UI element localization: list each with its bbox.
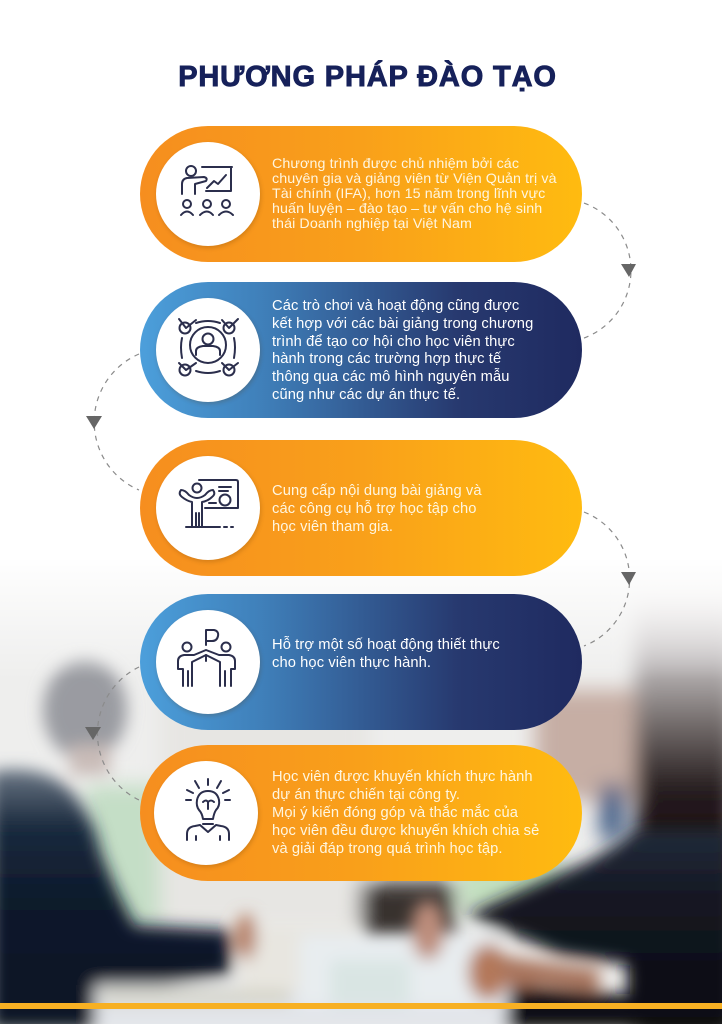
icon: person surrounded by targets: [156, 298, 260, 402]
text: step 4: [272, 636, 500, 671]
arrow: pill 1 to pill 2: [584, 202, 636, 339]
title: PHƯƠNG PHÁP ĐÀO TẠO: [178, 61, 557, 93]
text: step 2: hành trong các trường hợp thực tế: [272, 351, 501, 367]
text: step 1: huấn luyện – đào tạo – tư vấn cho hệ sinh: [272, 201, 542, 217]
text: step 1: thái Doanh nghiệp tại Việt Nam: [272, 216, 472, 232]
arrow: pill 4 to pill 5: [85, 666, 140, 800]
text: step 5: học viên đều được khuyến khích chia sẻ: [272, 823, 539, 839]
text: step 5: và giải đáp trong quá trình học tập.: [272, 841, 503, 857]
text: step 1: chuyên gia và giảng viên từ Viện Quản trị và: [272, 171, 557, 187]
icon: presenter with chart and audience: [156, 142, 260, 246]
icon: presenter with board: [156, 456, 260, 560]
text: step 2: cũng như các dự án thực tế.: [272, 387, 460, 403]
text: step 1: Chương trình được chủ nhiệm bởi các: [272, 156, 519, 172]
text: step 2: kết hợp với các bài giảng trong chương: [272, 316, 533, 332]
icon: person with light bulb: [154, 761, 258, 865]
text: step 1: [272, 156, 557, 232]
text: step 5: [272, 769, 539, 857]
panel: step 2 games and activities: [140, 282, 582, 418]
text: step 1: Tài chính (IFA), hơn 15 năm trong lĩnh vực: [272, 186, 545, 202]
text: step 3: [272, 483, 482, 535]
text: step 4: cho học viên thực hành.: [272, 655, 431, 671]
panel: step 1 instructors: [140, 126, 582, 262]
text: step 2: thông qua các mô hình nguyên mẫu: [272, 369, 510, 385]
arrow: pill 3 to pill 4: [584, 512, 636, 646]
text: step 3: Cung cấp nội dung bài giảng và: [272, 483, 482, 499]
arrow: pill 2 to pill 3: [86, 354, 140, 490]
text: step 2: [272, 298, 533, 403]
text: step 5: dự án thực chiến tại công ty.: [272, 787, 460, 803]
text: step 2: Các trò chơi và hoạt động cũng được: [272, 298, 519, 314]
text: step 2: trình để tạo cơ hội cho học viên thực: [272, 334, 515, 350]
panel: step 5 real projects and feedback: [140, 745, 582, 881]
text: step 5: Học viên được khuyến khích thực hành: [272, 769, 533, 785]
text: step 3: các công cụ hỗ trợ học tập cho: [272, 501, 477, 517]
panel: step 3 learning materials: [140, 440, 582, 576]
text: step 3: học viên tham gia.: [272, 519, 393, 535]
text: step 4: Hỗ trợ một số hoạt động thiết thực: [272, 637, 500, 653]
text: step 5: Mọi ý kiến đóng góp và thắc mắc của: [272, 805, 518, 821]
icon: two people holding a flag: [156, 610, 260, 714]
panel: step 4 practical activities: [140, 594, 582, 730]
